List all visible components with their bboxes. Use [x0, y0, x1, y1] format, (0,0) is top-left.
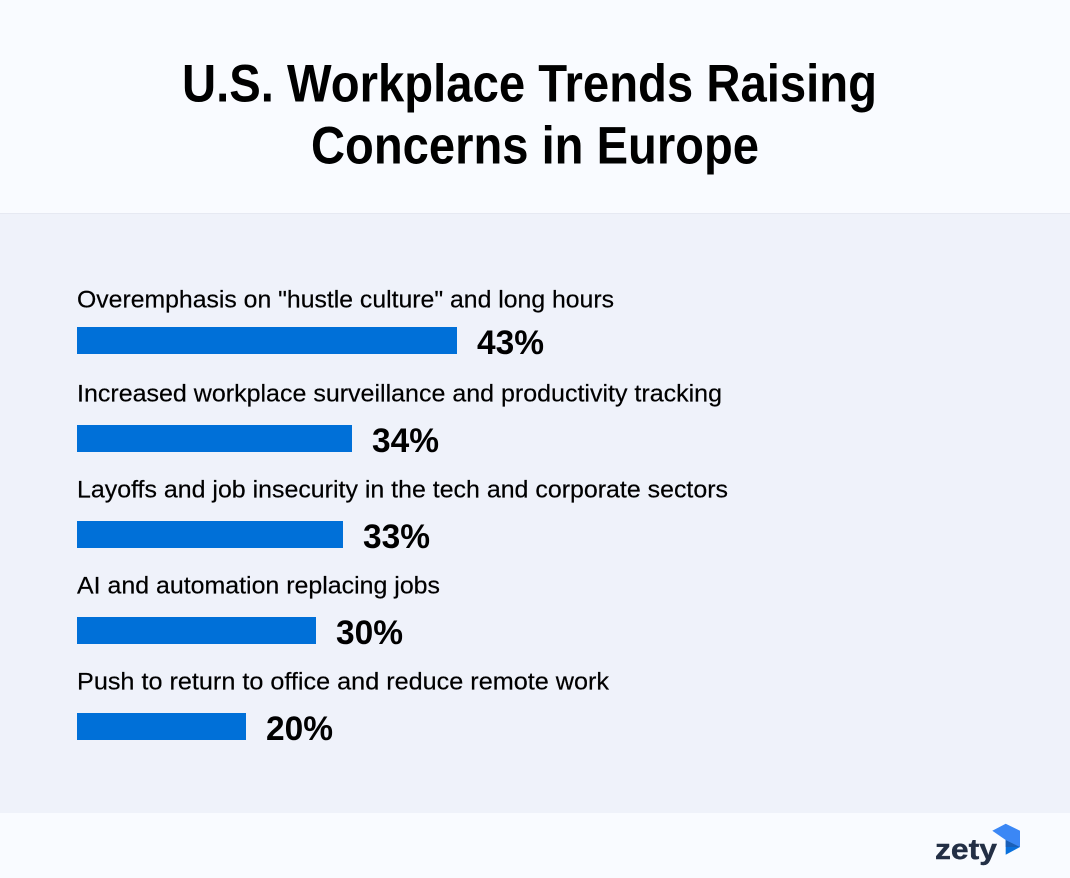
logo: zety	[935, 824, 1020, 866]
row: hustle culture 43%: 43%	[477, 324, 544, 362]
title	[182, 54, 877, 176]
row: AI 30%	[77, 572, 440, 652]
row: layoffs 33%	[77, 476, 728, 556]
row: return to office 20%: 20%	[266, 710, 333, 748]
logo: zety: zety	[935, 834, 997, 866]
row: AI 30%: AI and automation replacing jobs	[77, 572, 440, 600]
bar chart	[77, 286, 728, 748]
row: hustle culture 43%	[77, 286, 614, 362]
row: surveillance 34%: 34%	[372, 422, 439, 460]
header band	[0, 0, 1070, 213]
icon: logo mark	[992, 824, 1020, 855]
row: hustle culture 43%: Overemphasis on "hustle culture" and long hours	[77, 286, 614, 314]
title: Concerns in Europe	[311, 116, 759, 176]
title: U.S. Workplace Trends Raising	[182, 54, 877, 114]
panel: chart background	[0, 213, 1070, 813]
row: layoffs 33%: 33%	[363, 518, 430, 556]
row: surveillance 34%	[77, 380, 722, 460]
row: surveillance 34%: Increased workplace surveillance and productivity tracking	[77, 380, 722, 408]
row: layoffs 33%: Layoffs and job insecurity in the tech and corporate sectors	[77, 476, 728, 504]
row: return to office 20%	[77, 668, 610, 748]
row: AI 30%: 30%	[336, 614, 403, 652]
row: return to office 20%: Push to return to office and reduce remote work	[77, 668, 610, 696]
